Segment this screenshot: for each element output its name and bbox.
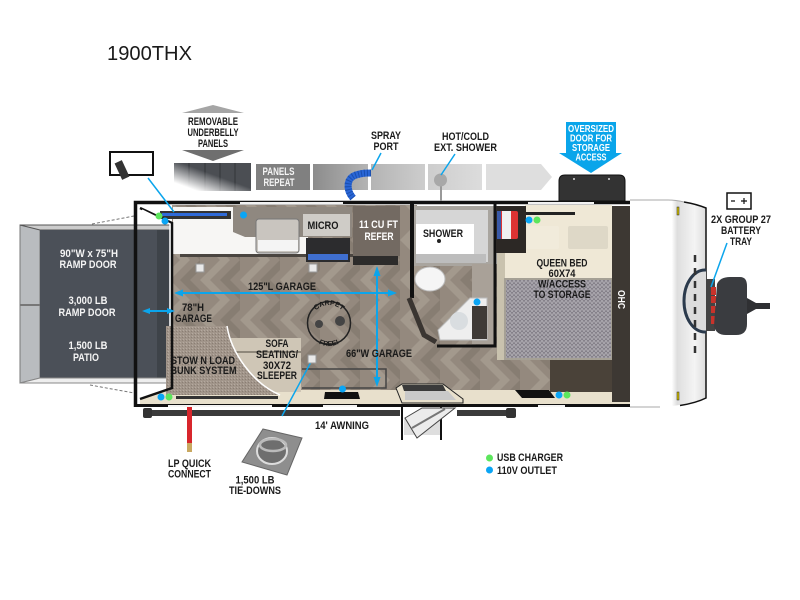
underbelly panels strip: REPEAT (264, 177, 295, 189)
spray port: PORT (374, 141, 399, 153)
callout: removable underbelly panels: UNDERBELLY (188, 127, 239, 139)
garage storage outline (302, 369, 386, 388)
refrigerator (353, 206, 400, 265)
overhead cabinets (612, 206, 630, 402)
cap logo (682, 255, 706, 353)
battery label: 2X GROUP 27 (711, 214, 771, 226)
awning (143, 408, 516, 418)
icon: tie-down (229, 429, 302, 497)
sofa: SOFA (266, 338, 289, 350)
icon: tie-down: 1,500 LB (236, 474, 275, 486)
callout: removable underbelly panels: PANELS (198, 138, 228, 150)
sofa: 30X72 (263, 360, 291, 372)
callout: oversized door arrow: DOOR FOR (570, 134, 613, 144)
callout: oversized door arrow: STORAGE (572, 143, 610, 154)
refrigerator: 11 CU FT (359, 219, 398, 231)
ramp door panel: 1,500 LB (68, 340, 108, 352)
outlet and usb dots (156, 212, 570, 400)
callout: oversized door arrow: OVERSIZED (568, 124, 614, 135)
spray port: SPRAY (371, 130, 402, 142)
hitch and battery tray (706, 277, 770, 335)
legend: 110V OUTLET (497, 465, 557, 477)
battery label: BATTERY (721, 225, 762, 237)
dimension labels: GARAGE (175, 313, 212, 325)
legend: USB CHARGER (497, 452, 563, 464)
underbelly panels strip: PANELS (262, 166, 294, 178)
carpet free stamp: CARPET (314, 300, 345, 310)
callout: oversized door arrow (559, 122, 622, 173)
dimension labels: 125"L GARAGE (248, 281, 316, 293)
bathroom: SHOWER (423, 228, 463, 240)
overhead cabinets: OHC (615, 290, 626, 309)
battery label (711, 214, 771, 248)
underbelly panels strip (174, 163, 552, 191)
lp quick connect: LP QUICK (168, 458, 211, 470)
callout: removable underbelly panels (182, 105, 244, 161)
dimension labels: 66"W GARAGE (346, 348, 412, 360)
refrigerator: REFER (364, 231, 394, 243)
sofa: SLEEPER (257, 370, 297, 382)
dimension labels: 14' AWNING (315, 420, 369, 432)
title: 1900THX (107, 43, 192, 65)
carpet free stamp: FREE! (319, 340, 338, 346)
icon: tie-down: TIE-DOWNS (229, 485, 281, 497)
stow n load bunk: BUNK SYSTEM (170, 365, 236, 377)
bed (497, 205, 612, 392)
carpet free stamp (306, 300, 352, 346)
stow n load bunk: STOW N LOAD (171, 355, 235, 367)
dimension labels (175, 281, 412, 432)
bed: TO STORAGE (534, 289, 590, 301)
legend (486, 452, 563, 477)
tie-down floor ring (308, 355, 316, 363)
kitchen counter and appliances: MICRO (308, 220, 339, 232)
ramp door panel: 3,000 LB (68, 295, 108, 307)
front cap (630, 200, 706, 407)
spray port (348, 130, 402, 198)
bathroom (409, 204, 495, 346)
hot cold exterior shower: EXT. SHOWER (434, 142, 497, 154)
trailer outer walls (134, 202, 630, 407)
hot cold exterior shower (434, 131, 497, 201)
icon: remote control box (110, 152, 153, 180)
ramp door panel: PATIO (73, 352, 99, 364)
dimension labels: 78"H (182, 302, 204, 314)
icon: battery (727, 193, 751, 209)
ramp door panel: RAMP DOOR (60, 259, 117, 271)
callout: removable underbelly panels: REMOVABLE (188, 116, 238, 128)
kitchen counter and appliances (160, 207, 355, 272)
sofa (231, 338, 301, 392)
ramp door panel (20, 216, 172, 393)
sofa: SEATING/ (256, 349, 298, 361)
trailer floor (140, 205, 630, 404)
bed: QUEEN BED (536, 258, 588, 270)
wheel well cutouts (324, 390, 555, 399)
lp quick connect (168, 407, 211, 480)
hot cold exterior shower: HOT/COLD (442, 131, 489, 143)
callout: oversized door arrow: ACCESS (576, 152, 607, 164)
bed: W/ACCESS (538, 278, 586, 290)
lp quick connect: CONNECT (168, 468, 211, 480)
storage door (559, 175, 625, 201)
garage dimension arrows (142, 266, 397, 387)
ramp door panel: 90"W x 75"H (60, 248, 118, 260)
wardrobe (496, 206, 526, 253)
battery label: TRAY (730, 236, 753, 248)
ramp door panel: RAMP DOOR (58, 307, 116, 319)
entry steps (402, 407, 455, 440)
stow n load bunk (166, 326, 280, 399)
bed: 60X74 (548, 268, 576, 280)
callout leader lines (148, 153, 727, 416)
entry door threshold (396, 384, 463, 403)
